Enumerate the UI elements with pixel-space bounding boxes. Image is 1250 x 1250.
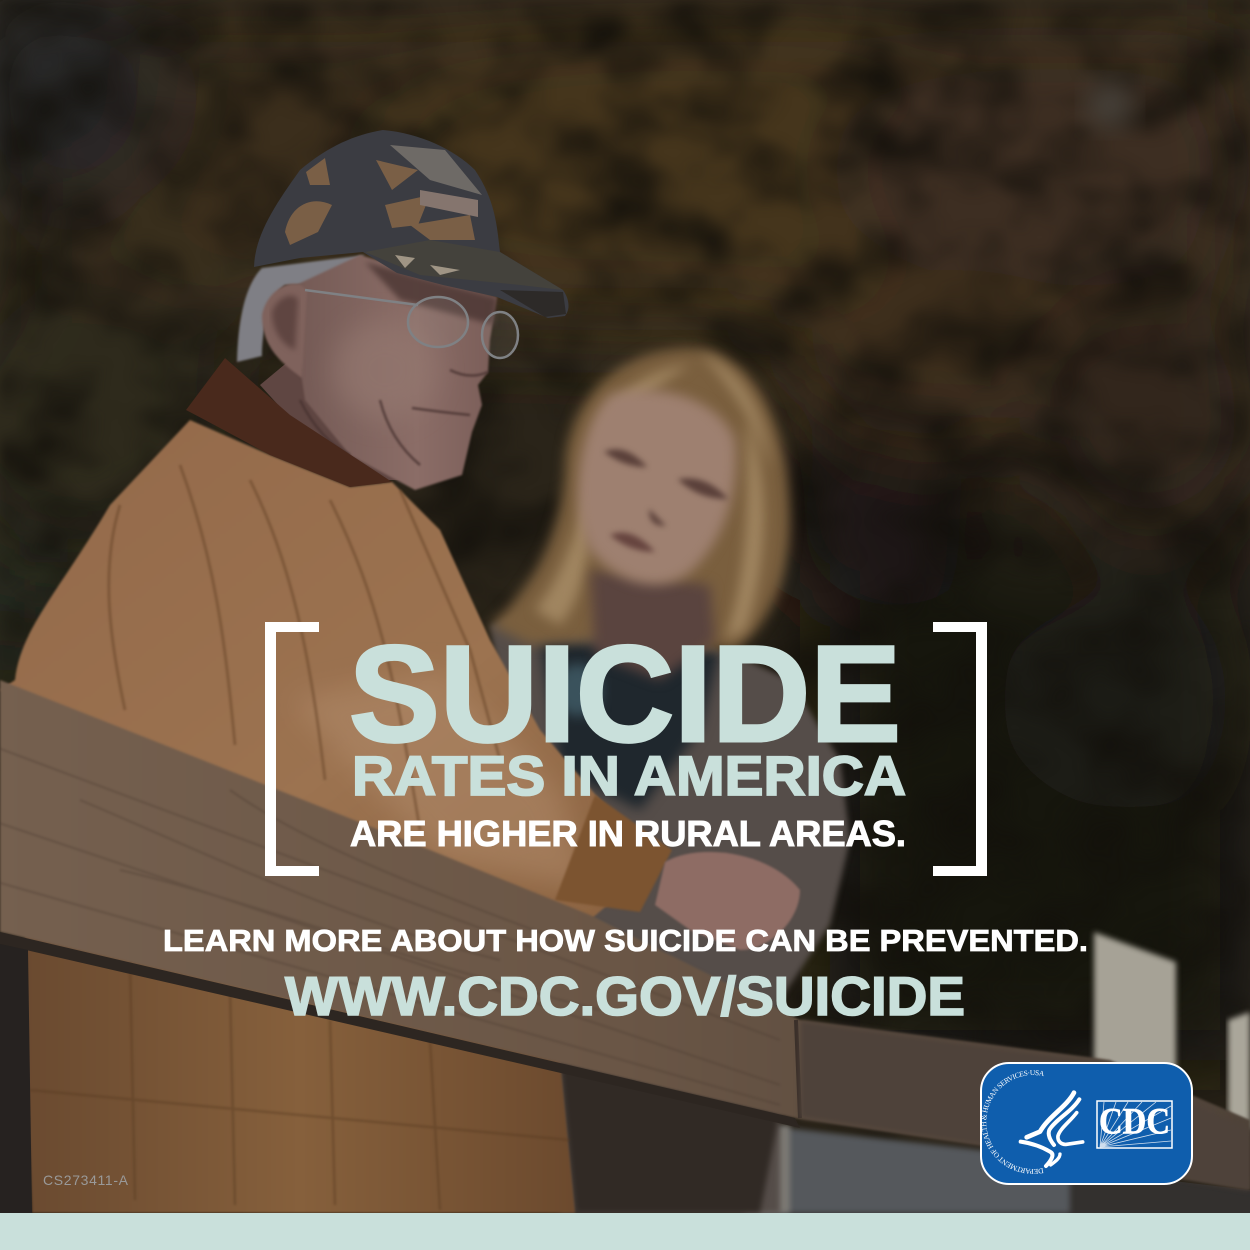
campaign code: CS273411-A <box>43 1172 129 1188</box>
man: knit cuff <box>555 795 672 912</box>
HHS eagle mark <box>1021 1093 1083 1166</box>
woman: teal scarf glimpse <box>554 664 602 716</box>
woman: eyes, nose and mouth <box>606 450 726 552</box>
photo: older man in tan work jacket <box>0 130 672 1213</box>
man: neck <box>260 360 420 480</box>
woman: face <box>578 390 736 584</box>
woman: hair highlights <box>535 352 772 640</box>
woman: lower jacket <box>560 1060 780 1213</box>
HHS seal text on a circle: DEPARTMENT OF HEALTH & HUMAN SERVICES·USA <box>982 1070 1044 1174</box>
man: camouflage cap <box>254 130 569 318</box>
call to action text: LEARN MORE ABOUT HOW SUICIDE CAN BE PREVENTED. <box>163 923 1088 958</box>
man: shadow under cap brim <box>365 262 497 325</box>
man: nose, mouth and cheek creases <box>300 370 488 465</box>
man: light on forearm <box>290 670 590 890</box>
woman: jacket <box>490 600 850 1213</box>
headline: RATES IN AMERICA: RATES IN AMERICA <box>352 744 906 807</box>
man: jacket upper <box>0 420 660 920</box>
woman: hair <box>490 348 790 650</box>
man: ear inner shadow <box>272 296 298 350</box>
logo: HHS and CDC badge <box>980 1062 1193 1185</box>
bottom mint strip <box>0 1213 1250 1250</box>
man: jacket lower <box>25 930 575 1213</box>
right bracket <box>933 622 987 876</box>
photo: young woman with blonde hair <box>490 348 850 1213</box>
photo: distant posts and fence on the right <box>740 932 1250 1213</box>
woman: neck <box>590 570 715 680</box>
man: hair <box>237 255 365 362</box>
woman: dark shirt <box>540 640 720 810</box>
man: face <box>296 255 497 490</box>
man: lower quilting <box>30 960 570 1210</box>
website URL: WWW.CDC.GOV/SUICIDE <box>285 965 965 1027</box>
headline: SUICIDE: SUICIDE <box>349 618 901 771</box>
CDC box with rays: CDC <box>1099 1102 1170 1142</box>
headline: ARE HIGHER IN RURAL AREAS.: ARE HIGHER IN RURAL AREAS. <box>350 813 906 854</box>
photo: man's hand resting on rail <box>655 852 800 950</box>
man: corduroy collar <box>186 358 392 487</box>
left bracket <box>265 622 319 876</box>
photo: wooden fence rail in foreground <box>0 680 1250 1213</box>
man: ear <box>262 284 307 378</box>
man: quilting seams <box>109 465 500 830</box>
man: cheek highlight <box>333 320 437 420</box>
man: eyeglasses <box>305 290 518 358</box>
